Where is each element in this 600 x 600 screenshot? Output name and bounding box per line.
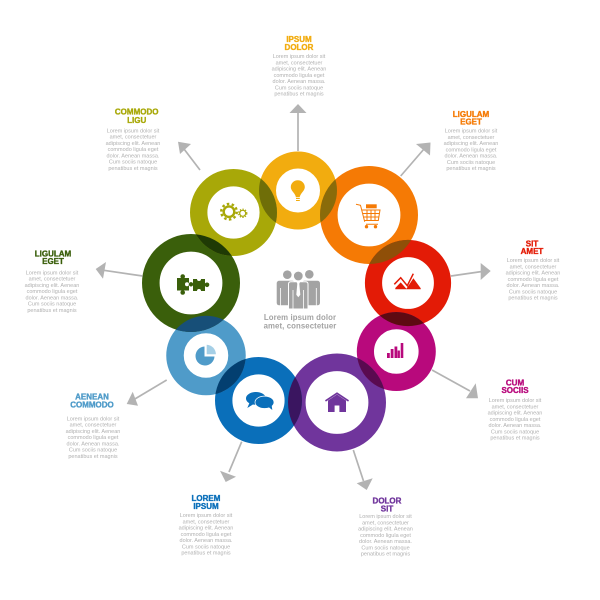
body text: cum sociis: commodo ligula eget bbox=[490, 417, 541, 423]
heading: ipsum dolor: DOLOR bbox=[285, 43, 314, 52]
heading: sit amet: AMET bbox=[521, 247, 543, 256]
panel: dolor sit bbox=[297, 362, 413, 558]
body text: ligulam eget orange: adipiscing elit. Aenean bbox=[444, 141, 498, 147]
body text: lorem ipsum: Lorem ipsum dolor sit bbox=[180, 513, 233, 519]
body text: commodo ligu: Lorem ipsum dolor sit bbox=[107, 128, 160, 134]
heading: cum sociis: CUM bbox=[506, 379, 524, 388]
body text: dolor sit: Cum sociis natoque bbox=[361, 545, 410, 551]
body text: sit amet: dolor. Aenean massa. bbox=[507, 283, 560, 289]
body text: dolor sit: commodo ligula eget bbox=[360, 533, 411, 539]
body text: ligulam eget orange: dolor. Aenean massa. bbox=[445, 154, 498, 160]
ring: yellow bbox=[268, 160, 328, 221]
ring: olive bbox=[199, 178, 268, 247]
ring: red bbox=[374, 248, 442, 318]
body text: commodo ligu: adipiscing elit. Aenean bbox=[106, 141, 160, 147]
body text: aenean commodo: adipiscing elit. Aenean bbox=[66, 429, 120, 435]
body text: ipsum dolor: penatibus et magnis bbox=[274, 92, 324, 98]
body text: ligulam eget orange: amet, consectetuer bbox=[448, 135, 495, 141]
body text: ligulam eget green: dolor. Aenean massa. bbox=[26, 295, 79, 301]
heading: commodo ligu: COMMODO bbox=[115, 108, 158, 117]
body text: cum sociis: adipiscing elit. Aenean bbox=[488, 410, 542, 416]
body text: ipsum dolor: amet, consectetuer bbox=[276, 60, 323, 66]
heading: aenean commodo: COMMODO bbox=[70, 401, 114, 410]
icon: gears bbox=[221, 204, 247, 220]
ring: orange bbox=[329, 175, 409, 255]
body text: lorem ipsum: amet, consectetuer bbox=[183, 519, 230, 525]
body text: commodo ligu: Cum sociis natoque bbox=[109, 160, 157, 166]
body text: dolor sit: amet, consectetuer bbox=[362, 520, 409, 526]
body text: ligulam eget green: Lorem ipsum dolor sit bbox=[26, 270, 79, 276]
heading: ligulam eget green: EGET bbox=[42, 257, 64, 266]
arrow: right bbox=[451, 263, 491, 280]
body text: commodo ligu: amet, consectetuer bbox=[110, 135, 157, 141]
heading: cum sociis: SOCIIS bbox=[501, 386, 529, 395]
icon: light bulb bbox=[291, 180, 305, 201]
body text: sit amet: adipiscing elit. Aenean bbox=[506, 270, 560, 276]
body text: ligulam eget green: penatibus et magnis bbox=[27, 308, 77, 314]
body text: dolor sit: adipiscing elit. Aenean bbox=[358, 526, 413, 532]
body text: dolor sit: dolor. Aenean massa. bbox=[359, 539, 412, 545]
body text: sit amet: Cum sociis natoque bbox=[509, 289, 557, 295]
ring: magenta bbox=[365, 321, 427, 382]
body text: aenean commodo: Lorem ipsum dolor sit bbox=[67, 416, 120, 422]
arrow: down bbox=[353, 450, 373, 490]
body text: aenean commodo: penatibus et magnis bbox=[68, 454, 118, 460]
body text: aenean commodo: amet, consectetuer bbox=[70, 423, 117, 429]
heading: ligulam eget green: LIGULAM bbox=[35, 250, 72, 259]
panel: aenean commodo bbox=[66, 324, 237, 460]
body text: ipsum dolor: Lorem ipsum dolor sit bbox=[273, 54, 326, 60]
ring: dark green bbox=[151, 243, 231, 323]
icon: mountain chart bbox=[394, 274, 421, 289]
heading: ligulam eget orange: LIGULAM bbox=[453, 110, 490, 119]
panel: sit amet bbox=[374, 240, 560, 318]
body text: sit amet: penatibus et magnis bbox=[508, 296, 558, 302]
body text: cum sociis: dolor. Aenean massa. bbox=[489, 423, 542, 429]
arrow: down right bbox=[432, 370, 478, 398]
body text: lorem ipsum: Cum sociis natoque bbox=[182, 544, 230, 550]
ring: light blue bbox=[175, 324, 237, 386]
body text: ligulam eget green: Cum sociis natoque bbox=[28, 302, 76, 308]
arrow: up bbox=[290, 104, 306, 151]
body text: sit amet: commodo ligula eget bbox=[508, 277, 559, 283]
body text: sit amet: Lorem ipsum dolor sit bbox=[507, 258, 560, 264]
panel: ligulam eget orange bbox=[329, 110, 498, 255]
body text: lorem ipsum: penatibus et magnis bbox=[181, 550, 231, 556]
arrow: up left bbox=[178, 142, 200, 170]
text: center caption: amet, consectetuer bbox=[264, 322, 336, 330]
panel: cum sociis bbox=[365, 321, 542, 442]
heading: lorem ipsum: LOREM bbox=[192, 494, 221, 503]
icon: shopping cart bbox=[356, 204, 380, 228]
body text: ligulam eget green: adipiscing elit. Aenean bbox=[25, 283, 79, 289]
body text: cum sociis: amet, consectetuer bbox=[492, 404, 539, 410]
body text: sit amet: amet, consectetuer bbox=[510, 264, 557, 270]
body text: ligulam eget orange: Cum sociis natoque bbox=[447, 160, 495, 166]
ring overlaps bbox=[176, 178, 424, 426]
icon: pie chart bbox=[196, 345, 216, 365]
panel: ligulam eget green bbox=[25, 243, 231, 323]
panel: ipsum dolor bbox=[268, 35, 328, 221]
body text: lorem ipsum: adipiscing elit. Aenean bbox=[179, 526, 233, 532]
body text: ligulam eget green: amet, consectetuer bbox=[29, 277, 76, 283]
body text: ligulam eget orange: Lorem ipsum dolor sit bbox=[445, 129, 498, 135]
arrow: down left bbox=[220, 442, 242, 482]
text: center caption: Lorem ipsum dolor bbox=[264, 313, 336, 322]
body text: ipsum dolor: commodo ligula eget bbox=[274, 73, 325, 79]
body text: commodo ligu: dolor. Aenean massa. bbox=[107, 153, 160, 159]
body text: cum sociis: Cum sociis natoque bbox=[491, 429, 539, 435]
body text: cum sociis: Lorem ipsum dolor sit bbox=[489, 398, 542, 404]
arrow: up right bbox=[401, 142, 430, 176]
panel: lorem ipsum bbox=[179, 366, 293, 556]
panel: commodo ligu bbox=[106, 108, 268, 247]
ring: purple bbox=[297, 362, 377, 443]
body text: ligulam eget orange: penatibus et magnis bbox=[446, 166, 496, 172]
heading: dolor sit: DOLOR bbox=[373, 497, 402, 506]
heading: lorem ipsum: IPSUM bbox=[193, 502, 219, 511]
heading: commodo ligu: LIGU bbox=[127, 116, 146, 125]
body text: ipsum dolor: Cum sociis natoque bbox=[275, 85, 323, 91]
body text: aenean commodo: commodo ligula eget bbox=[68, 435, 119, 441]
heading: dolor sit: SIT bbox=[381, 505, 393, 514]
body text: lorem ipsum: dolor. Aenean massa. bbox=[180, 538, 233, 544]
heading: ligulam eget orange: EGET bbox=[460, 118, 482, 126]
icon: bar chart bbox=[387, 343, 403, 358]
body text: cum sociis: penatibus et magnis bbox=[490, 436, 540, 442]
heading: aenean commodo: AENEAN bbox=[75, 393, 109, 402]
body text: ipsum dolor: dolor. Aenean massa. bbox=[273, 79, 326, 85]
body text: lorem ipsum: commodo ligula eget bbox=[181, 532, 232, 538]
body text: aenean commodo: Cum sociis natoque bbox=[69, 448, 117, 454]
panel: center team bbox=[264, 270, 336, 330]
arrow: down left bbox=[127, 380, 167, 406]
body text: ipsum dolor: adipiscing elit. Aenean bbox=[272, 66, 326, 72]
body text: dolor sit: Lorem ipsum dolor sit bbox=[359, 514, 412, 520]
body text: commodo ligu: penatibus et magnis bbox=[108, 166, 158, 172]
body text: aenean commodo: dolor. Aenean massa. bbox=[67, 441, 120, 447]
icon: house bbox=[325, 392, 349, 412]
heading: sit amet: SIT bbox=[526, 240, 538, 249]
body text: commodo ligu: commodo ligula eget bbox=[108, 147, 159, 153]
icon: puzzle pieces bbox=[177, 274, 209, 295]
icon: chat bubbles bbox=[246, 392, 274, 410]
icon: group of people bbox=[277, 270, 320, 309]
body text: dolor sit: penatibus et magnis bbox=[361, 552, 410, 558]
body text: ligulam eget orange: commodo ligula eget bbox=[446, 147, 497, 153]
ring: blue bbox=[224, 366, 293, 435]
heading: ipsum dolor: IPSUM bbox=[286, 35, 312, 44]
arrow: left bbox=[96, 262, 143, 279]
body text: ligulam eget green: commodo ligula eget bbox=[27, 289, 78, 295]
